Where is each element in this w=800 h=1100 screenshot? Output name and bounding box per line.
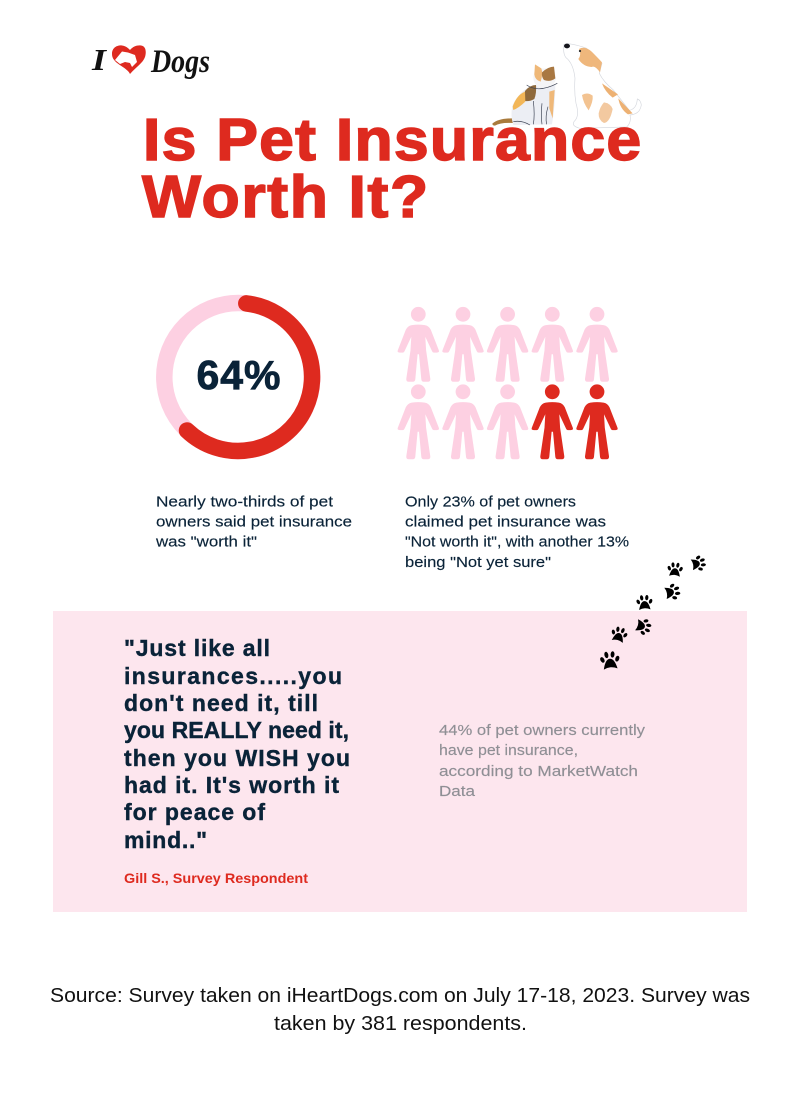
text: MarketWatch stat xyxy=(439,722,646,800)
text: worth it stat: Nearly two-thirds of pet xyxy=(156,494,334,510)
source note: taken by 381 respondents. xyxy=(274,1013,527,1035)
quote text: you REALLY need it, xyxy=(124,717,349,743)
paw prints xyxy=(599,554,707,670)
title: Is Pet Insurance xyxy=(143,107,641,173)
text: MarketWatch stat: 44% of pet owners currently xyxy=(439,722,646,739)
source note xyxy=(50,985,750,1035)
quote text: for peace of xyxy=(124,799,265,825)
pictogram: ten people, two highlighted xyxy=(398,307,618,459)
illustration: cat and dog xyxy=(492,44,641,128)
text: not worth it stat: being "Not yet sure" xyxy=(405,554,551,571)
text: MarketWatch stat: according to MarketWatch xyxy=(439,763,638,780)
donut chart: 64%: 64% xyxy=(196,352,280,398)
quote text: "Just like all xyxy=(124,635,270,661)
quote text: don't need it, till xyxy=(124,690,318,716)
source note: Source: Survey taken on iHeartDogs.com on July 17-18, 2023. Survey was xyxy=(50,985,750,1007)
text: not worth it stat: "Not worth it", with another 13% xyxy=(405,534,629,550)
text: worth it stat xyxy=(155,494,352,550)
panel: quote background xyxy=(53,611,747,912)
logo: I heart Dogs: I xyxy=(91,42,107,77)
cat xyxy=(492,64,557,126)
logo: I heart Dogs: Dogs xyxy=(150,44,210,80)
quote text: had it. It's worth it xyxy=(124,772,339,798)
logo: I heart Dogs xyxy=(91,42,210,80)
quote attribution: Gill S., Survey Respondent xyxy=(124,870,308,886)
quote text: insurances.....you xyxy=(124,663,342,689)
text: not worth it stat: claimed pet insurance was xyxy=(405,514,606,530)
quote text: then you WISH you xyxy=(124,745,350,771)
text: worth it stat: owners said pet insurance xyxy=(156,514,352,530)
text: MarketWatch stat: Data xyxy=(439,783,476,800)
text: worth it stat: was "worth it" xyxy=(155,534,257,550)
text: not worth it stat: Only 23% of pet owners xyxy=(405,494,576,510)
text: MarketWatch stat: have pet insurance, xyxy=(439,742,578,759)
dog xyxy=(564,44,641,128)
donut chart: 64% xyxy=(164,303,312,451)
quote text xyxy=(124,635,350,853)
title: Worth It? xyxy=(142,164,428,230)
text: not worth it stat xyxy=(405,494,629,571)
quote text: mind.." xyxy=(124,827,207,853)
title xyxy=(142,107,641,230)
